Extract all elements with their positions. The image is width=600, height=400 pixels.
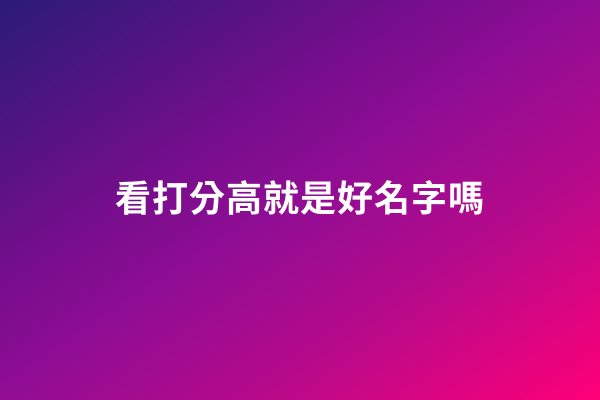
title: 看打分高就是好名字嗎 [115, 178, 485, 219]
